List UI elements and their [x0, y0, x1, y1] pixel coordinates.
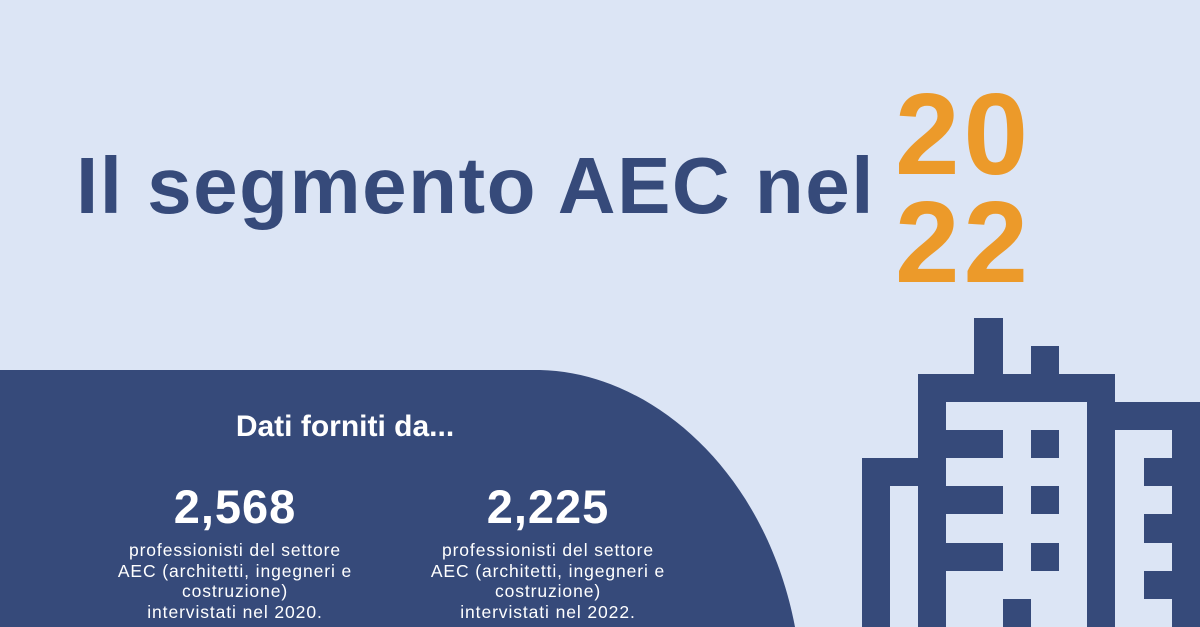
stat 2020: intervistati nel 2020.	[147, 602, 323, 622]
stat 2020	[118, 480, 352, 622]
stat 2022: AEC (architetti, ingegneri e	[431, 560, 665, 580]
stat 2022: intervistati nel 2022.	[460, 602, 636, 622]
year	[895, 69, 1032, 307]
stat 2020: costruzione)	[182, 581, 288, 601]
stat 2022: 2,225	[487, 480, 609, 533]
stat 2022: professionisti del settore	[442, 540, 654, 560]
stat 2020: professionisti del settore	[129, 540, 341, 560]
stat 2022: costruzione)	[495, 581, 601, 601]
subheading: Dati forniti da...	[236, 410, 454, 443]
stat 2022	[430, 480, 665, 622]
title: Il segmento AEC nel	[76, 141, 875, 230]
stat 2020: 2,568	[174, 480, 296, 533]
year: 22	[895, 177, 1032, 307]
stat 2020: AEC (architetti, ingegneri e	[118, 560, 352, 580]
year: 20	[895, 69, 1032, 199]
